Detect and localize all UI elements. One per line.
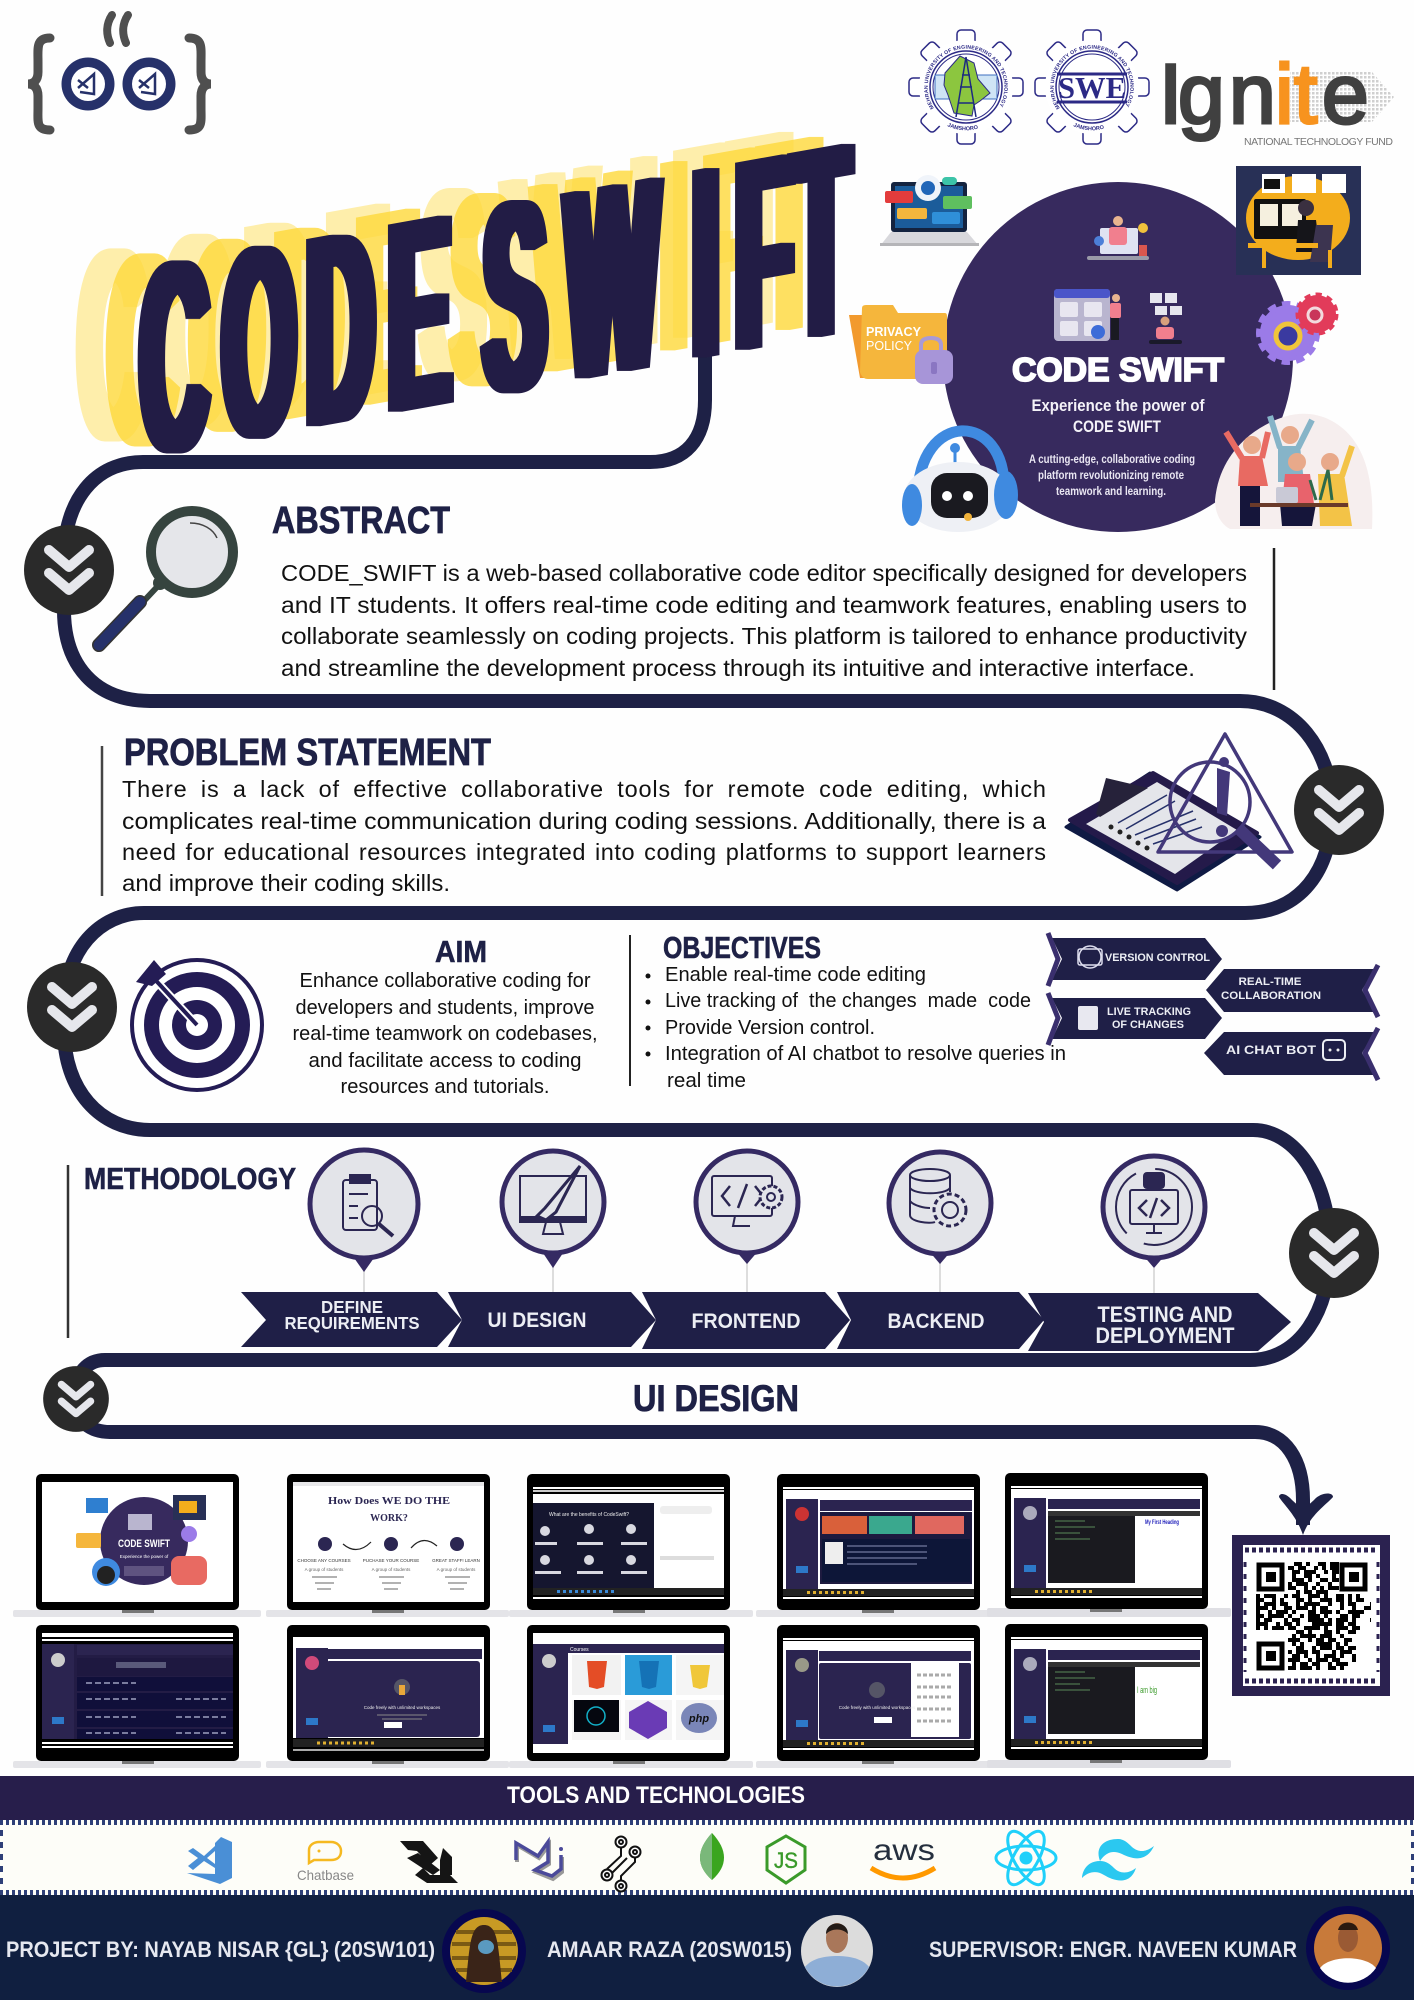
laptop: how does it work page: WORK? <box>370 1513 408 1524</box>
text: abstract: and streamline the development process through its intuitive and interactive interface. <box>281 655 1195 681</box>
laptop: courses grid <box>527 1625 730 1761</box>
text: aim: real-time teamwork on codebases, <box>292 1023 598 1045</box>
laptop: how does it work page: A group of students <box>372 1567 411 1572</box>
text: aim: and facilitate access to coding <box>308 1050 582 1072</box>
text: objectives list: real time <box>667 1070 746 1092</box>
title shadow yellow: CODE SWIFT <box>109 79 817 511</box>
logo: code swift <box>28 15 211 130</box>
step arrow: frontend: FRONTEND <box>692 1310 800 1333</box>
chevron badge: aim <box>27 962 117 1052</box>
ribbon: live tracking of changes: OF CHANGES <box>1112 1019 1184 1031</box>
laptop: dark landing with chat <box>527 1474 730 1610</box>
text: objectives list: Provide Version control. <box>665 1017 875 1039</box>
laptop: how does it work page: A group of students <box>437 1567 476 1572</box>
icon: privacy policy folder: POLICY <box>866 338 912 353</box>
step arrow: define requirements: DEFINE <box>321 1297 383 1317</box>
laptop: courses grid: php <box>688 1713 709 1725</box>
ribbon: AI chat bot <box>1204 1028 1378 1080</box>
step arrow: backend: BACKEND <box>888 1310 984 1333</box>
icon: privacy policy folder: PRIVACY <box>866 324 921 339</box>
text: objectives list <box>646 964 1066 1092</box>
text: abstract: collaborate seamlessly on coding projects. This platform is tailored to enhance productivity <box>281 623 1247 649</box>
text: aim: Enhance collaborative coding for <box>300 970 591 992</box>
text: aim: developers and students, improve <box>296 997 594 1019</box>
laptop: workspace with activity panel: Code freely with unlimited workspaces <box>839 1705 916 1710</box>
text: objectives list: Integration of AI chatbot to resolve queries in <box>665 1043 1066 1065</box>
icon: MongoDB leaf <box>700 1833 724 1880</box>
laptop: how does it work page <box>287 1474 490 1610</box>
step arrow: frontend <box>642 1292 850 1349</box>
icon: circuit git <box>602 1836 640 1892</box>
text: objectives list: Live tracking of the changes made code <box>665 990 1031 1012</box>
icon: workstation illustration <box>1236 166 1361 275</box>
laptop: workspace with activity panel <box>777 1625 980 1761</box>
icon: Node.js <box>767 1836 805 1883</box>
ribbon: version control: VERSION CONTROL <box>1105 952 1210 964</box>
avatar: Amaar <box>801 1915 873 1987</box>
logo: SWE gear emblem: MEHRAN UNIVERSITY OF ENGINEERING AND TECHNOLOGY <box>1050 45 1134 110</box>
laptop: workspace empty state: Code freely with unlimited workspaces <box>364 1705 441 1710</box>
step arrow: define requirements: REQUIREMENTS <box>284 1313 420 1333</box>
laptop: how does it work page: GREAT STAFF! LEARN <box>432 1558 480 1563</box>
hero description: teamwork and learning. <box>1056 484 1166 498</box>
laptop: dark landing with chat: What are the benefits of CodeSwift? <box>549 1512 629 1518</box>
ribbon: real-time collaboration: REAL-TIME <box>1238 976 1302 988</box>
footer: Amaar: AMAAR RAZA (20SW015) <box>547 1937 792 1962</box>
step arrow: testing and deployment: DEPLOYMENT <box>1096 1323 1235 1348</box>
laptop bases row 1 <box>13 1608 1231 1617</box>
icon: Tailwind <box>1082 1839 1154 1881</box>
logo: Ignite National Technology Fund: NATIONAL TECHNOLOGY FUND <box>1244 136 1393 148</box>
heading: methodology: METHODOLOGY <box>84 1161 296 1196</box>
hero subtitle: CODE SWIFT <box>1073 417 1162 436</box>
laptop: code editor preview: I am big <box>1137 1685 1157 1695</box>
pin: UI design icon <box>502 1151 604 1292</box>
icon: remote person <box>1149 293 1182 344</box>
hero description: A cutting-edge, collaborative coding <box>1029 452 1195 466</box>
text: problem statement: complicates real-time communication during coding sessions. Additionally, there is a <box>122 808 1047 834</box>
chevron badge: UI design <box>43 1366 109 1432</box>
ribbon: real-time collaboration: COLLABORATION <box>1221 990 1321 1002</box>
heading: objectives: OBJECTIVES <box>663 930 821 965</box>
ribbon: live tracking of changes: LIVE TRACKING <box>1107 1006 1191 1018</box>
icon: VS Code <box>187 1837 232 1884</box>
text: aim: resources and tutorials. <box>340 1076 550 1098</box>
band: tools and technologies: TOOLS AND TECHNOLOGIES <box>507 1782 805 1809</box>
step arrow: define requirements <box>241 1292 462 1347</box>
ribbon: real-time collaboration <box>1206 965 1378 1017</box>
laptop: how does it work page: PUCHASE YOUR COURSE <box>363 1558 419 1563</box>
text: problem statement: need for educational resources integrated into coding platforms to support learners <box>122 839 1046 865</box>
logo: Ignite National Technology Fund: Ignite <box>1159 47 1369 141</box>
text: problem statement: and improve their coding skills. <box>122 870 450 896</box>
laptop: landing poster <box>36 1474 239 1610</box>
chevron badge: methodology <box>1289 1208 1379 1298</box>
logo: SWE gear emblem: SWE <box>1058 70 1126 105</box>
laptop: landing poster: CODE SWIFT <box>118 1538 170 1550</box>
logo: SWE gear emblem: JAMSHORO <box>1074 123 1104 130</box>
text: abstract: CODE_SWIFT is a web-based collaborative code editor specifically designed for developers <box>281 560 1247 586</box>
pin: testing and deployment icon <box>1103 1156 1205 1293</box>
logo: SWE gear emblem <box>1034 29 1150 145</box>
step arrow: backend <box>837 1292 1044 1349</box>
icon: video call person <box>1087 216 1149 260</box>
step arrow: UI design: UI DESIGN <box>488 1309 586 1332</box>
hero circle <box>943 182 1293 532</box>
footer band <box>0 1895 1414 2000</box>
avatar: supervisor <box>1306 1906 1390 1990</box>
icon: black interlocked logo <box>400 1841 458 1883</box>
icon: AWS <box>871 1834 935 1878</box>
laptop: code editor <box>1005 1473 1208 1609</box>
chevron badge: abstract <box>24 525 114 615</box>
icon: MJ logo <box>516 1842 563 1879</box>
pin: frontend icon <box>696 1151 798 1292</box>
laptop: code editor: My First Heading <box>1145 1520 1179 1526</box>
icon: AWS: aws <box>873 1834 935 1867</box>
laptop: how does it work page: How Does WE DO THE <box>328 1496 450 1507</box>
pin: backend icon <box>889 1152 991 1292</box>
heading: problem statement: PROBLEM STATEMENT <box>124 732 491 774</box>
laptop: courses grid: Courses <box>570 1647 589 1653</box>
icon: meeting grid <box>1054 289 1121 341</box>
band: tools and technologies <box>0 1776 1414 1820</box>
text: abstract: and IT students. It offers real-time code editing and teamwork features, enabling users to <box>281 592 1247 618</box>
hero description: platform revolutionizing remote <box>1038 468 1184 482</box>
tools strip <box>0 1820 1414 1895</box>
laptop: how does it work page: A group of students <box>305 1567 344 1572</box>
laptop: projects table <box>36 1625 239 1761</box>
icon: robot with headset <box>902 431 1018 532</box>
ribbon: live tracking of changes <box>1048 993 1222 1045</box>
avatar: Nayab <box>442 1909 526 1993</box>
footer: supervisor: SUPERVISOR: ENGR. NAVEEN KUMAR <box>929 1937 1297 1962</box>
text: objectives list: Enable real-time code editing <box>665 964 926 986</box>
icon: clipboard with warning <box>1066 734 1292 890</box>
footer: project by: PROJECT BY: NAYAB NISAR {GL} (20SW101) <box>6 1937 435 1962</box>
icon: privacy policy folder <box>849 305 953 384</box>
QR code <box>1232 1535 1390 1696</box>
laptop: workspace empty state <box>287 1625 490 1761</box>
text: problem statement: There is a lack of effective collaborative tools for remote code editing, which <box>122 776 1046 802</box>
icon: purple gears <box>1260 295 1336 361</box>
laptop: how does it work page: CHOOSE ANY COURSES <box>297 1558 351 1563</box>
logo: MUET gear emblem <box>908 29 1024 145</box>
icon: laptop with chat <box>880 175 979 246</box>
laptop bases row 2 <box>13 1760 1231 1768</box>
step arrow: testing and deployment: TESTING AND <box>1098 1302 1232 1327</box>
connecting path line <box>64 355 1332 1525</box>
arrow head to QR <box>1279 1494 1333 1535</box>
chevron badge: problem <box>1294 765 1384 855</box>
step arrow: UI design <box>448 1292 656 1347</box>
heading: aim: AIM <box>435 934 487 969</box>
hero title: CODE SWIFT <box>1012 351 1224 388</box>
icon: React <box>996 1826 1056 1890</box>
laptop: code editor preview <box>1005 1624 1208 1760</box>
pin: define requirements icon <box>310 1150 418 1292</box>
icon: Chatbase: Chatbase <box>297 1867 354 1883</box>
ribbon: AI chat bot: AI CHAT BOT <box>1226 1043 1317 1057</box>
icon: magnifying glass <box>99 511 233 645</box>
title shadow light: CODE SWIFT <box>79 74 787 506</box>
ribbon: version control <box>1048 933 1222 986</box>
hero subtitle: Experience the power of <box>1032 396 1205 415</box>
icon: Chatbase <box>297 1842 354 1883</box>
icon: celebrating team <box>1215 414 1372 529</box>
laptop: landing poster: Experience the power of <box>120 1554 169 1559</box>
icon: target with arrow <box>132 960 262 1090</box>
step arrow: testing and deployment <box>1028 1293 1291 1351</box>
title: CODE SWIFT <box>141 86 849 518</box>
icon: Node.js: JS <box>774 1848 798 1873</box>
logo: MUET gear emblem: MEHRAN UNIVERSITY OF ENGINEERING AND TECHNOLOGY <box>924 45 1008 110</box>
heading: UI design: UI DESIGN <box>633 1378 799 1419</box>
logo: MUET gear emblem: JAMSHORO <box>948 123 978 130</box>
laptop: dashboard profile <box>777 1474 980 1610</box>
heading: abstract: ABSTRACT <box>272 500 450 542</box>
